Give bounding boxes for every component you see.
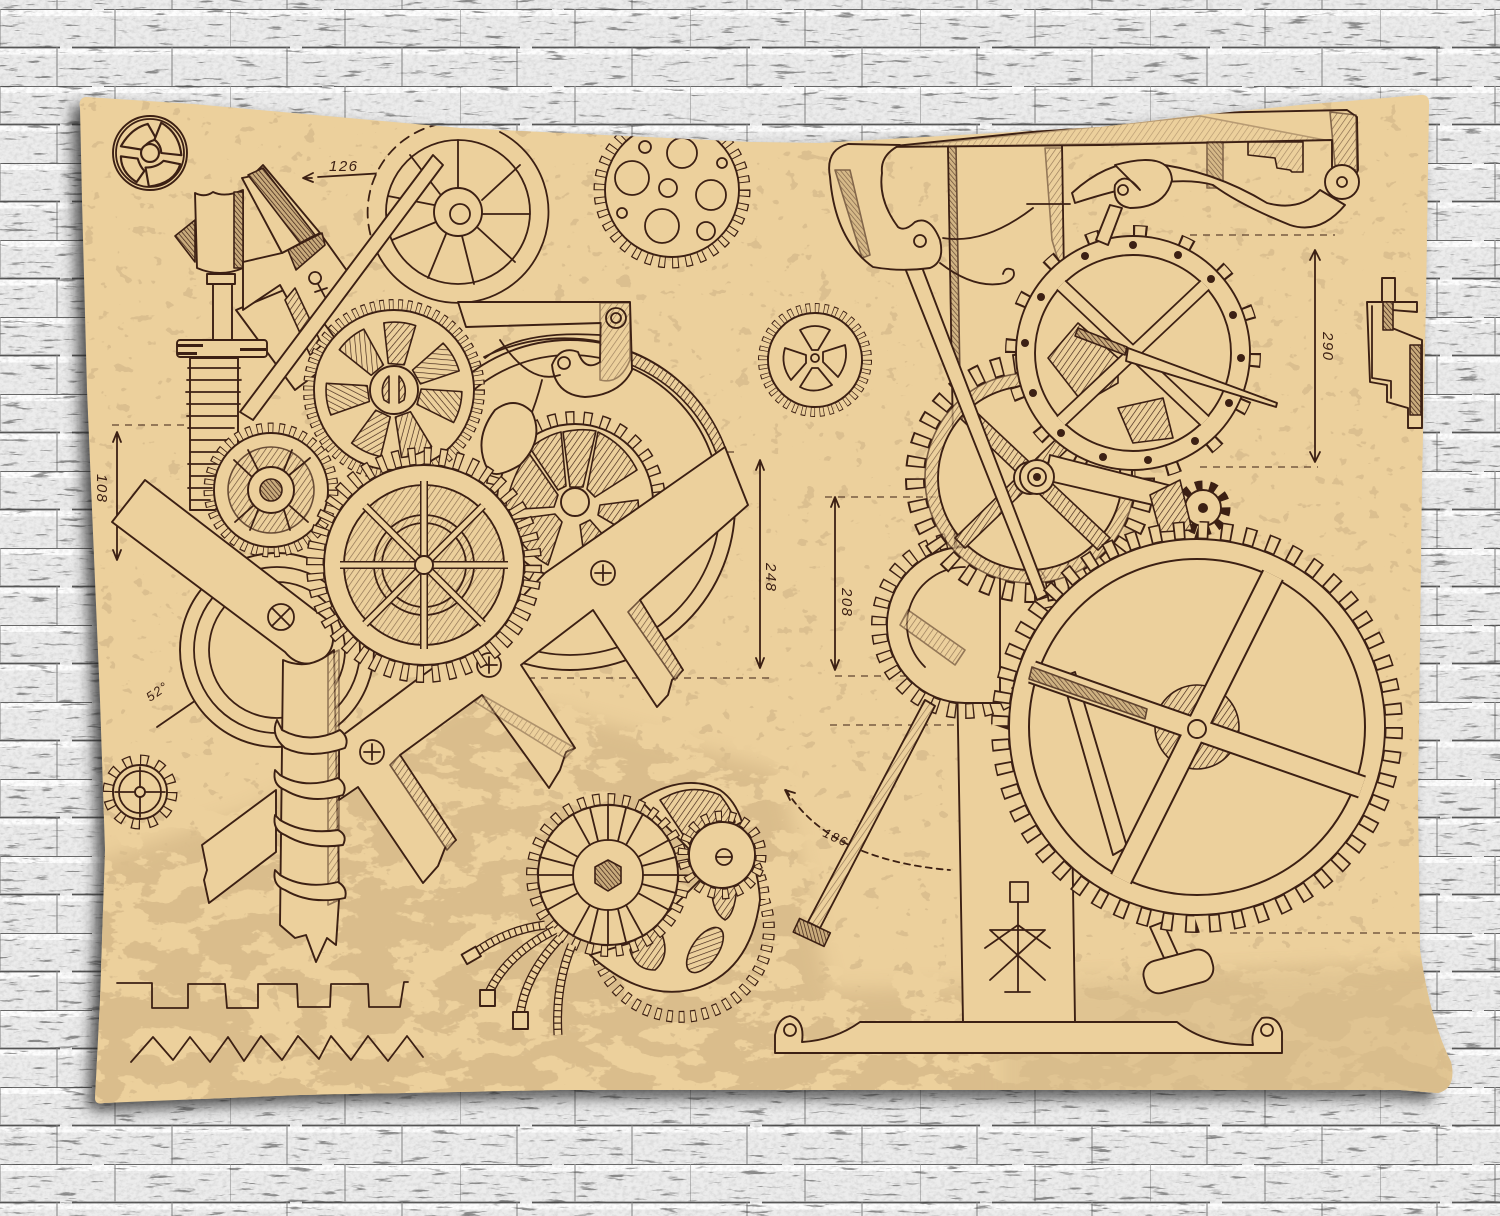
dimension 186 degrees: 186° bbox=[821, 825, 857, 853]
hammer rod bbox=[793, 700, 935, 946]
lower left ring bbox=[180, 553, 374, 747]
dimension 126: 126 bbox=[329, 158, 359, 175]
long diagonal rod bbox=[905, 262, 1047, 600]
dimension 126 bbox=[302, 161, 377, 183]
top bracket bar bbox=[885, 110, 1358, 188]
dimension 208 bbox=[831, 497, 855, 670]
gear with round holes bbox=[600, 118, 744, 262]
saw toothed wheel bbox=[1011, 231, 1277, 475]
dimension 108: 108 bbox=[93, 474, 110, 504]
big spoked gear bbox=[315, 456, 533, 674]
base with scroll feet bbox=[775, 1016, 1282, 1053]
dimension 248: 248 bbox=[762, 562, 779, 593]
back gear with fan blades bbox=[484, 338, 659, 586]
fan blade gear bbox=[309, 305, 479, 475]
right edge clamp piece bbox=[1367, 278, 1422, 428]
wrapped vertical post bbox=[274, 650, 347, 962]
big outer ring bbox=[448, 339, 736, 671]
diagonal pivot bar bbox=[112, 480, 333, 664]
central column bbox=[948, 145, 1075, 1022]
square wave line bbox=[117, 982, 408, 1008]
dimension 108 bbox=[93, 432, 121, 560]
dimension 290: 290 bbox=[1319, 331, 1336, 362]
lower left gear bbox=[879, 539, 1051, 711]
dimension 208: 208 bbox=[838, 587, 855, 618]
left assembly bbox=[112, 122, 748, 962]
lower hammer stem bbox=[1140, 922, 1216, 996]
symbol tubes bbox=[236, 165, 350, 390]
lower piston and pinion bbox=[1020, 455, 1226, 532]
long thin diagonal rod bbox=[240, 155, 443, 420]
dashed spoked wheel top bbox=[368, 122, 548, 303]
spool coil bbox=[177, 340, 267, 510]
crescent gear bbox=[590, 825, 769, 1017]
bottom cluster of gears bbox=[462, 783, 769, 1035]
planet symbol bbox=[309, 272, 327, 297]
radial wheel gear bbox=[532, 799, 684, 951]
small cross wheel lower left bbox=[108, 760, 172, 824]
tapestry shadow bbox=[72, 103, 1443, 1111]
dimension 52 degrees: 52° bbox=[143, 678, 172, 704]
dimension 290 bbox=[1310, 250, 1336, 462]
linkage arm and curl bbox=[458, 302, 632, 474]
middle hatched gear bbox=[915, 363, 1145, 593]
right machine bbox=[775, 110, 1394, 1053]
left cross band bbox=[202, 790, 276, 903]
zigzag line bbox=[131, 1036, 423, 1062]
small gear with petal windows bbox=[763, 308, 867, 412]
scroll curl and thin wires bbox=[940, 160, 1172, 284]
bracket curved arm and knob bbox=[1072, 162, 1359, 228]
cable tentacles bbox=[462, 925, 572, 1035]
small hub gear bbox=[209, 428, 333, 552]
dimension dashes bbox=[112, 235, 1420, 933]
alchemical figure bbox=[985, 882, 1050, 992]
small solid gear bbox=[683, 816, 761, 894]
dimension 52 degrees bbox=[146, 682, 194, 728]
small wheel top left bbox=[113, 116, 187, 190]
dimension 186 degrees bbox=[785, 790, 950, 870]
dimension 248 bbox=[756, 460, 779, 668]
cup tube bbox=[175, 190, 243, 340]
wide cross bands bbox=[339, 447, 748, 883]
big spoked gear bbox=[1000, 530, 1394, 924]
left hook bbox=[829, 144, 941, 270]
fan arc behind small gear bbox=[640, 783, 742, 850]
